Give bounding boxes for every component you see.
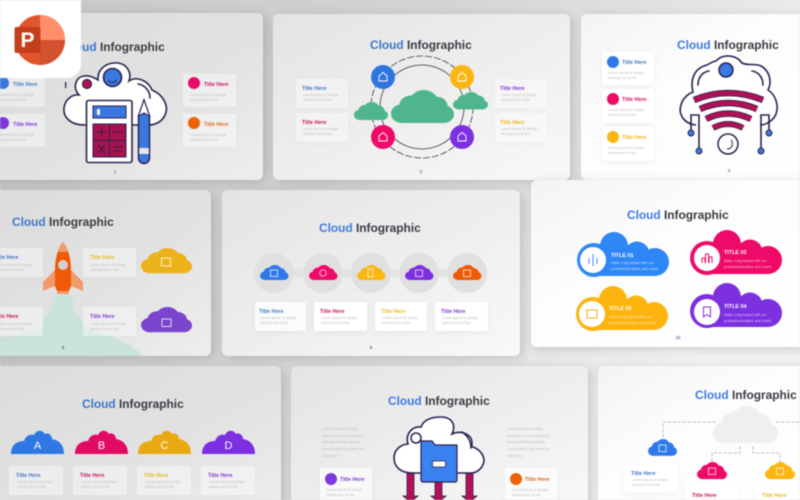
card: yellow: dummy text of the: [382, 321, 411, 325]
card: B: [73, 466, 127, 495]
text block: left: industry's: [322, 454, 337, 458]
text block: right: industry's: [507, 454, 522, 458]
card: right: Lorem Ipsum is simply: [512, 488, 548, 492]
card: left bottom: Title Here: [302, 120, 326, 126]
badge: PowerPoint logo: [0, 0, 81, 78]
card: B: Lorem Ipsum is simply: [81, 480, 117, 484]
card: purple: dummy text of the: [442, 321, 471, 325]
title: Cloud Infographic: [388, 394, 490, 408]
card: blue: Lorem Ipsum is simply: [632, 478, 668, 482]
step: purple cloud: [399, 253, 439, 293]
card: right top: Lorem Ipsum is simply: [90, 263, 126, 267]
cloud: title 02: professional slides and charts: [724, 265, 772, 269]
card: C: Lorem Ipsum is simply: [145, 480, 181, 484]
cloud: title 04: Make a big impact with our: [724, 313, 768, 317]
icon: folder cloud: [394, 417, 484, 500]
panel: slide 8 folder cloud: [291, 366, 588, 500]
card: right bottom: Title Here: [500, 120, 524, 126]
card: blue: dummy text of the: [260, 321, 289, 325]
icon: wifi cloud: [680, 56, 777, 154]
icon: pink node: [371, 125, 395, 149]
card: blue: Title Here: [259, 309, 283, 315]
card: right 1: Title Here: [204, 82, 228, 88]
card: C: dummy text of the: [145, 485, 174, 489]
title: Cloud Infographic: [319, 221, 421, 235]
icon: blue cloud: [648, 439, 677, 456]
card: pink: dummy text of the: [608, 113, 637, 117]
text block: left: Lorem Ipsum has been the: [322, 447, 365, 451]
card: right 2: [183, 114, 236, 147]
text block: left: and typesetting industry.: [322, 440, 361, 444]
text block: right: Lorem Ipsum has been the: [507, 447, 550, 451]
card: yellow: [755, 485, 800, 500]
connector bar: [280, 269, 465, 277]
panel: slide 2 ring: [273, 14, 570, 180]
card: left top: Title Here: [302, 86, 326, 92]
title: Cloud Infographic: [695, 388, 797, 402]
icon: yellow cloud: [141, 248, 192, 273]
cloud: B: B: [98, 440, 105, 452]
card: pink: Lorem Ipsum is simply: [321, 316, 357, 320]
panel: slide 5 five clouds: [222, 190, 520, 356]
card: yellow: Lorem Ipsum is simply: [608, 146, 644, 150]
card: purple: Lorem Ipsum is simply: [442, 316, 478, 320]
card: yellow: Lorem Ipsum is simply: [382, 316, 418, 320]
dashed connectors: [663, 422, 800, 462]
icon: blue node: [371, 65, 395, 89]
panel: slide 7 A B C D: [0, 366, 281, 500]
title: Cloud Infographic: [12, 215, 114, 229]
card: left: dummy text of the: [326, 493, 355, 497]
card: pink: Title Here: [320, 309, 344, 315]
card: right bottom: [83, 307, 136, 336]
card: right 1: [183, 74, 236, 107]
card: C: [137, 466, 191, 495]
card: right top: Title Here: [90, 255, 114, 261]
card: blue: dummy text of the: [632, 483, 661, 487]
card: right bottom: Lorem Ipsum is simply: [501, 127, 537, 131]
card: blue: Title Here: [622, 60, 646, 66]
panel: slide 6 title clouds: [531, 180, 800, 347]
card: B: dummy text of the: [81, 485, 110, 489]
card: A: Title Here: [16, 473, 40, 479]
title: Cloud Infographic: [82, 397, 184, 411]
cloud: title 04: professional slides and charts: [724, 319, 772, 323]
card: right 2: Title Here: [204, 122, 228, 128]
page number: 10: [675, 335, 681, 340]
cloud: C: [138, 431, 191, 454]
card: right bottom: Title Here: [90, 314, 114, 320]
card: right top: dummy text of the: [501, 98, 530, 102]
card: right: dummy text of the: [512, 493, 541, 497]
card: pink: dummy text of the: [321, 321, 350, 325]
card: left bottom: Lorem Ipsum is simply: [303, 127, 339, 131]
card: pink: [685, 485, 738, 500]
cloud: title 03: TITLE 03: [609, 306, 631, 312]
cloud: title 02: [690, 230, 782, 275]
card: D: dummy text of the: [209, 485, 238, 489]
cloud: title 03: [576, 286, 668, 331]
title: Cloud Infographic: [677, 38, 779, 52]
icon: large cloud: [391, 90, 454, 123]
card: blue: dummy text of the: [608, 76, 637, 80]
card: right 1: Lorem Ipsum is simply: [190, 93, 226, 97]
icon: yellow node: [450, 65, 474, 89]
cloud: title 02: Make a big impact with our: [724, 259, 768, 263]
card: right bottom: dummy text of the: [90, 327, 119, 331]
card: D: [201, 466, 255, 495]
cloud: title 01: Make a big impact with our: [611, 261, 655, 265]
cloud: title 01: TITLE 01: [611, 253, 633, 259]
card: C: Title Here: [144, 473, 168, 479]
card: A: dummy text of the: [17, 485, 46, 489]
cloud: title 03: professional slides and charts: [609, 321, 657, 325]
card: D: Lorem Ipsum is simply: [209, 480, 245, 484]
card: A: [9, 466, 63, 495]
card: left 1: Title Here: [13, 82, 37, 88]
card: right 2: dummy text of the: [190, 138, 219, 142]
cloud: A: [11, 431, 64, 454]
cloud: title 01: [577, 232, 669, 277]
card: blue: Lorem Ipsum is simply: [260, 316, 296, 320]
card: yellow: Title Here: [622, 135, 646, 141]
step: pink cloud: [303, 253, 343, 293]
card: right bottom: dummy text of the: [501, 132, 530, 136]
card: right top: Title Here: [500, 86, 524, 92]
card: yellow: Title Here: [381, 309, 405, 315]
cloud: title 02: TITLE 02: [724, 250, 746, 256]
illustration: rocket smoke: [0, 293, 143, 356]
panel: slide 1 calculator: [0, 13, 263, 180]
card: left top: [296, 79, 348, 108]
card: left 1: [0, 74, 45, 107]
page number: 1: [114, 169, 117, 174]
card: blue: [624, 464, 678, 493]
card: pink: Title Here: [622, 97, 646, 103]
panel: slide 3 wifi cloud: [581, 14, 800, 180]
cloud: D: [202, 431, 255, 454]
cloud: title 04: [690, 283, 782, 328]
card: left bottom: dummy text of the: [303, 132, 332, 136]
card: left bottom: [0, 307, 43, 336]
text block: right: Lorem Ipsum is simply: [507, 427, 543, 431]
card: left bottom: [296, 113, 348, 142]
card: left 2: [0, 114, 45, 147]
icon: purple cloud: [141, 307, 192, 332]
text block: left: Lorem Ipsum is simply: [322, 427, 358, 431]
title: Cloud Infographic: [63, 40, 165, 54]
icon: pink cloud: [697, 462, 727, 479]
card: left top: Lorem Ipsum is simply: [303, 93, 339, 97]
panel: slide 9 hierarchy: [598, 366, 800, 500]
text block: right: [507, 427, 550, 458]
card: yellow: [602, 127, 654, 161]
card: right: [505, 468, 557, 500]
icon: PowerPoint: P: [20, 29, 35, 52]
title: Cloud Infographic: [627, 208, 729, 222]
card: left: Title Here: [340, 477, 364, 483]
cloud: title 04: TITLE 04: [724, 304, 746, 310]
card: blue: [602, 52, 654, 85]
step: blue cloud: [254, 253, 294, 293]
title: Cloud Infographic: [370, 38, 472, 52]
card: right: Title Here: [525, 477, 549, 483]
step: yellow cloud: [351, 253, 391, 293]
page number: 9: [370, 345, 373, 350]
card: yellow: [375, 302, 427, 331]
card: left top: [0, 248, 43, 277]
text block: left: dummy text of the printing: [322, 434, 363, 438]
page number: 8: [62, 345, 65, 350]
cloud: title 03: Make a big impact with our: [609, 315, 653, 319]
icon: small right cloud: [453, 92, 488, 109]
card: A: Lorem Ipsum is simply: [17, 480, 53, 484]
cloud: title 01: professional slides and charts: [611, 267, 659, 271]
page number: 2: [420, 169, 423, 174]
icon: cloud with calculator: [64, 63, 166, 164]
text block: right: and typesetting industry.: [507, 440, 546, 444]
card: left: [320, 468, 372, 500]
icon: purple node: [450, 125, 474, 149]
card: pink: [314, 302, 367, 331]
card: right 1: dummy text of the: [190, 98, 219, 102]
card: pink: [602, 89, 654, 123]
card: right top: Lorem Ipsum is simply: [501, 93, 537, 97]
card: pink: Title Here: [692, 493, 716, 499]
card: D: Title Here: [208, 473, 232, 479]
card: yellow: dummy text of the: [608, 151, 637, 155]
text block: right: dummy text of the printing: [507, 434, 548, 438]
step: orange cloud: [447, 253, 487, 293]
card: right top: dummy text of the: [90, 268, 119, 272]
card: yellow: Title Here: [762, 493, 786, 499]
card: blue: Lorem Ipsum is simply: [608, 71, 644, 75]
icon: small left cloud: [354, 102, 388, 120]
text block: left: [322, 427, 365, 458]
cloud: B: [75, 431, 128, 454]
card: left: Lorem Ipsum is simply: [326, 488, 362, 492]
icon: yellow cloud: [765, 462, 795, 479]
card: purple: Title Here: [441, 309, 465, 315]
cloud: A: A: [34, 440, 42, 452]
card: left top: dummy text of the: [303, 98, 332, 102]
icon: rocket: [43, 242, 83, 294]
card: right 2: Lorem Ipsum is simply: [190, 133, 226, 137]
card: blue: [255, 302, 306, 331]
card: right bottom: Lorem Ipsum is simply: [90, 322, 126, 326]
card: blue: Title Here: [631, 471, 655, 477]
card: B: Title Here: [80, 473, 104, 479]
card: right top: [83, 248, 136, 277]
card: right top: [495, 79, 547, 108]
card: pink: Lorem Ipsum is simply: [608, 108, 644, 112]
cloud: C: C: [161, 440, 169, 452]
chart: dashed and solid rings: [371, 56, 473, 158]
page number: 3: [728, 168, 731, 173]
panel: slide 4 rocket: [0, 190, 211, 356]
card: right bottom: [495, 113, 547, 142]
card: left 2: Title Here: [13, 122, 37, 128]
icon: large grey cloud: [713, 406, 778, 443]
card: purple: [435, 302, 488, 331]
cloud: D: D: [225, 440, 233, 452]
